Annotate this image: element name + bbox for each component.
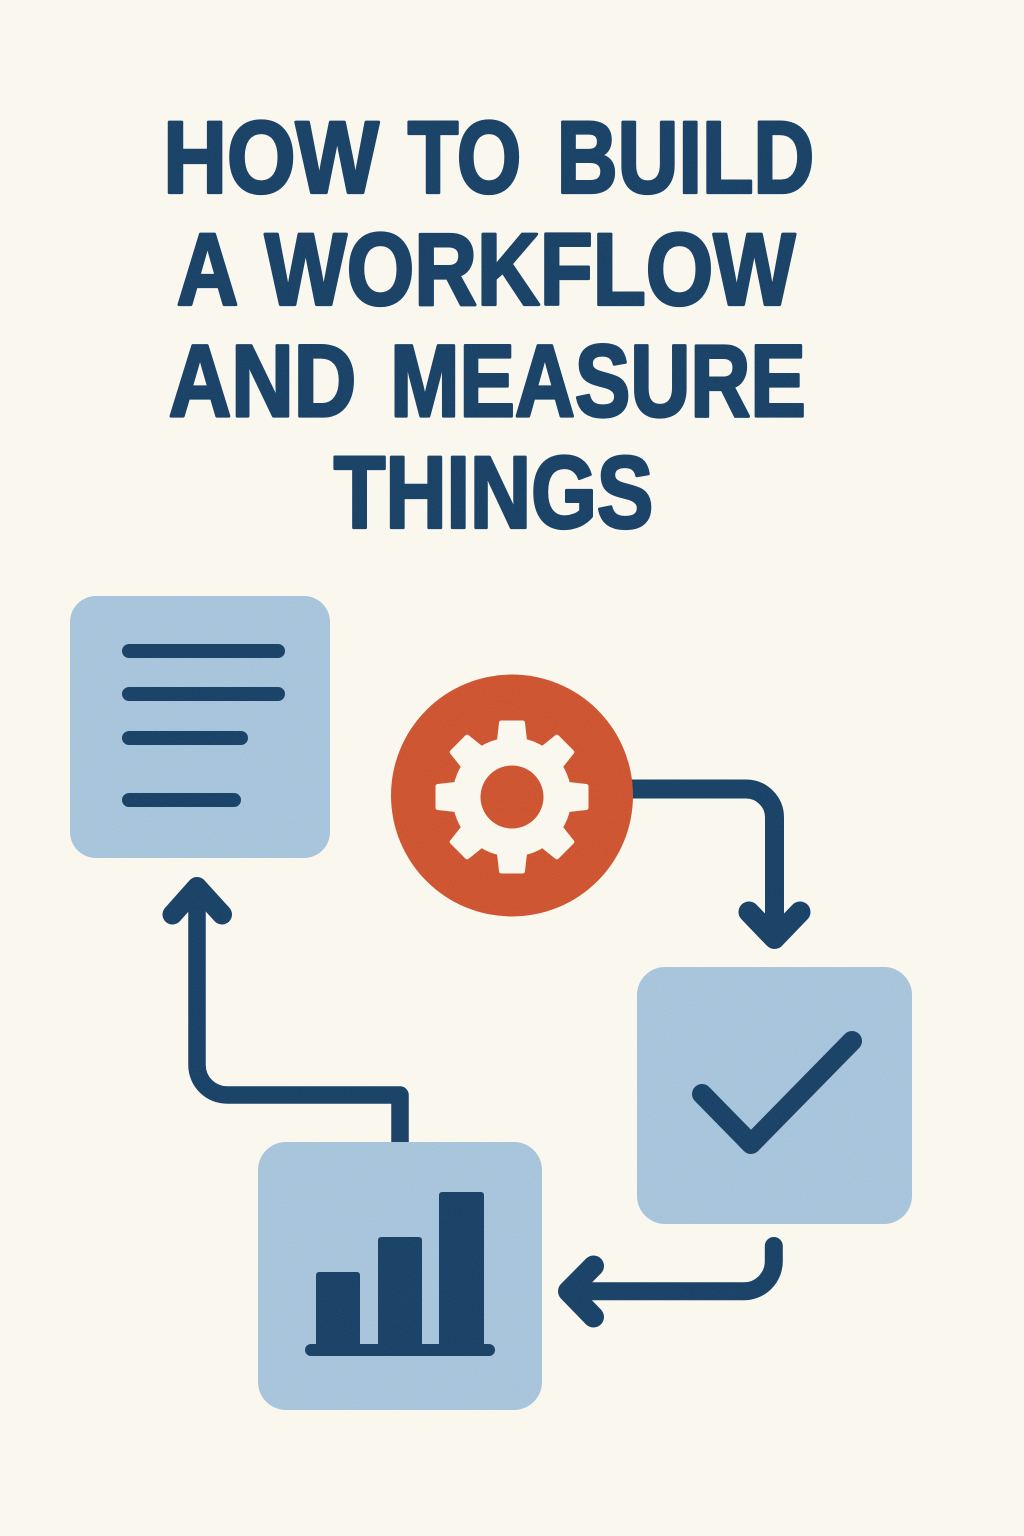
title: THINGS bbox=[334, 435, 653, 549]
title: WORKFLOW bbox=[265, 212, 796, 326]
icon: bar chart bbox=[305, 1192, 495, 1356]
arrow: check to chart bbox=[568, 1246, 774, 1317]
icon: document lines bbox=[129, 651, 278, 800]
title bbox=[163, 101, 814, 549]
panel: chart card bbox=[258, 1142, 542, 1410]
panel: document card bbox=[70, 596, 330, 858]
panel: check card bbox=[637, 967, 912, 1224]
title: TO bbox=[408, 101, 521, 215]
title: HOW bbox=[163, 101, 379, 215]
icon: check mark bbox=[702, 1041, 852, 1144]
title: AND bbox=[169, 324, 356, 438]
arrow: gear to check bbox=[620, 789, 800, 938]
title: A bbox=[177, 212, 238, 326]
title: MEASURE bbox=[390, 324, 806, 438]
arrow: chart to document bbox=[172, 887, 400, 1150]
title: BUILD bbox=[557, 101, 814, 215]
icon: gear in red circle bbox=[391, 674, 633, 916]
